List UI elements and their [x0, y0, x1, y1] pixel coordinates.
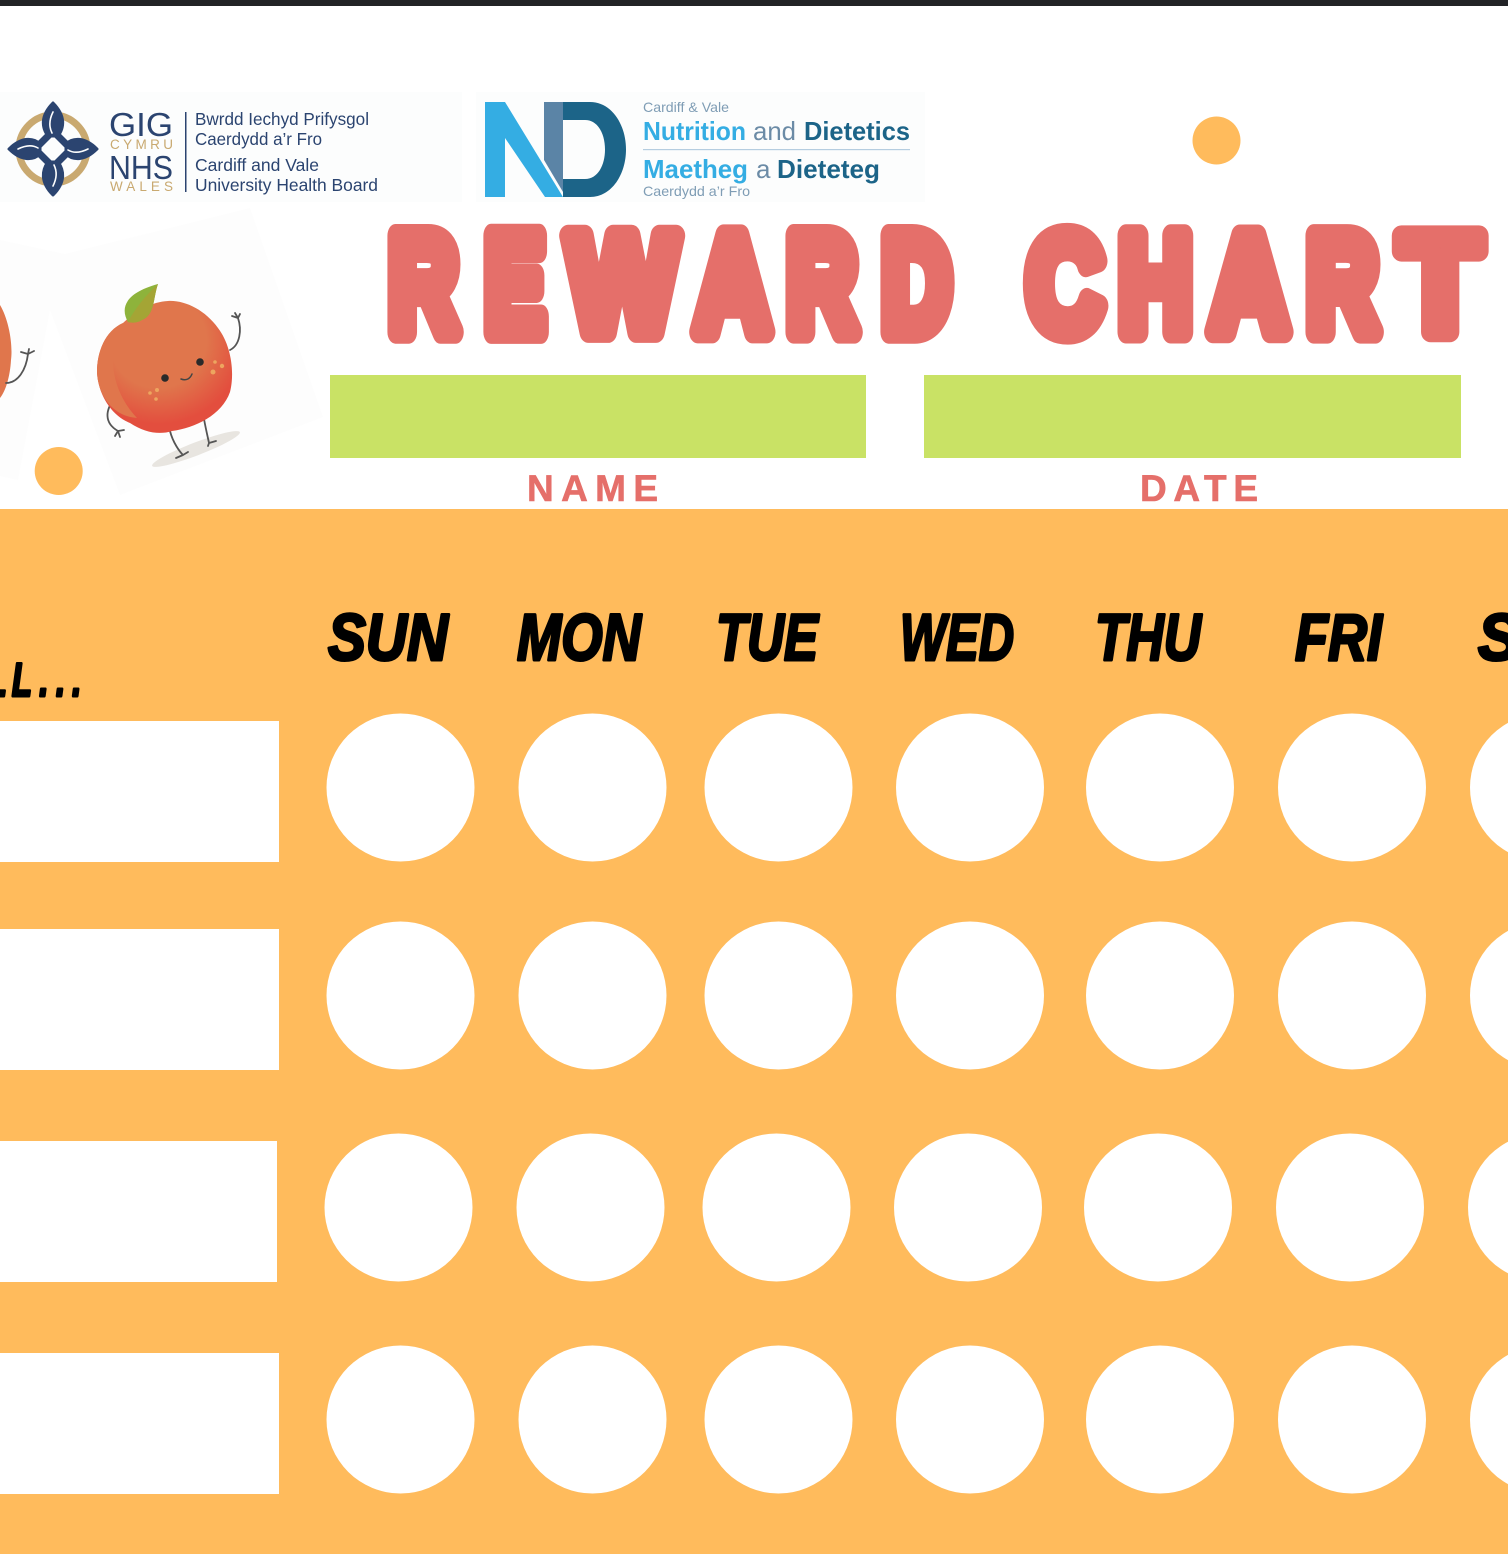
department name — [643, 99, 910, 199]
goal boxes — [0, 721, 279, 1494]
department name: Caerdydd a’r Fro — [643, 183, 750, 199]
decorative orange dot, left — [35, 447, 83, 495]
day headings: TUE — [716, 600, 820, 674]
day headings — [328, 600, 1508, 674]
health board name — [195, 109, 378, 195]
icon: Celtic knot crest — [9, 103, 97, 195]
department name: Dieteteg — [777, 154, 880, 184]
date field — [924, 375, 1461, 458]
name label: NAME — [527, 468, 658, 509]
department name: and — [753, 116, 796, 146]
day headings: SUN — [328, 600, 449, 674]
name field — [330, 375, 866, 458]
sticker circles row 3 — [324, 1134, 1508, 1282]
department name: a — [756, 154, 771, 184]
title: A — [1210, 207, 1288, 362]
title: C — [1027, 206, 1103, 363]
GIG Cymru NHS Wales wordmark: CYMRU — [110, 137, 173, 152]
title: E — [485, 206, 545, 362]
decorative orange dot, top right — [1192, 116, 1240, 164]
title: R — [787, 206, 857, 362]
sticker circles row 2 — [326, 922, 1508, 1070]
panel: weekly chart background — [0, 509, 1508, 1554]
department name: Maetheg — [643, 154, 748, 184]
icon: dancing peach — [97, 284, 242, 472]
title: D — [882, 207, 951, 362]
GIG Cymru NHS Wales wordmark — [109, 106, 173, 194]
title: R — [389, 207, 458, 362]
department name: Nutrition — [643, 116, 746, 146]
peach illustration cards — [0, 208, 323, 495]
icon: left peach, cropped — [0, 305, 34, 398]
department name: Cardiff & Vale — [643, 99, 729, 115]
GIG Cymru NHS Wales wordmark: NHS — [109, 149, 173, 186]
health board name: Bwrdd Iechyd Prifysgol — [195, 109, 369, 129]
logo: Cardiff and Vale University Health Board — [0, 92, 462, 202]
title: A — [695, 207, 770, 363]
day headings: WED — [900, 600, 1014, 674]
title: W — [568, 206, 677, 363]
health board name: Caerdydd a’r Fro — [195, 129, 322, 149]
department name: Dietetics — [804, 116, 910, 146]
title: H — [1119, 206, 1192, 362]
title: T — [1400, 205, 1480, 362]
GIG Cymru NHS Wales wordmark: GIG — [109, 106, 173, 143]
day headings: THU — [1095, 600, 1203, 674]
date label: DATE — [1140, 468, 1258, 509]
health board name: University Health Board — [195, 175, 378, 195]
icon: ND monogram — [485, 102, 626, 197]
sticker circles row 1 — [326, 714, 1508, 862]
top dark bar — [0, 0, 1508, 6]
sticker circles row 4 — [326, 1346, 1508, 1494]
logo: Nutrition and Dietetics — [476, 92, 925, 202]
health board name: Cardiff and Vale — [195, 155, 319, 175]
GIG Cymru NHS Wales wordmark: WALES — [110, 179, 173, 194]
day headings: MON — [517, 600, 642, 674]
title: R — [1307, 206, 1378, 362]
day headings: FRI — [1295, 600, 1383, 674]
title — [389, 205, 1480, 363]
